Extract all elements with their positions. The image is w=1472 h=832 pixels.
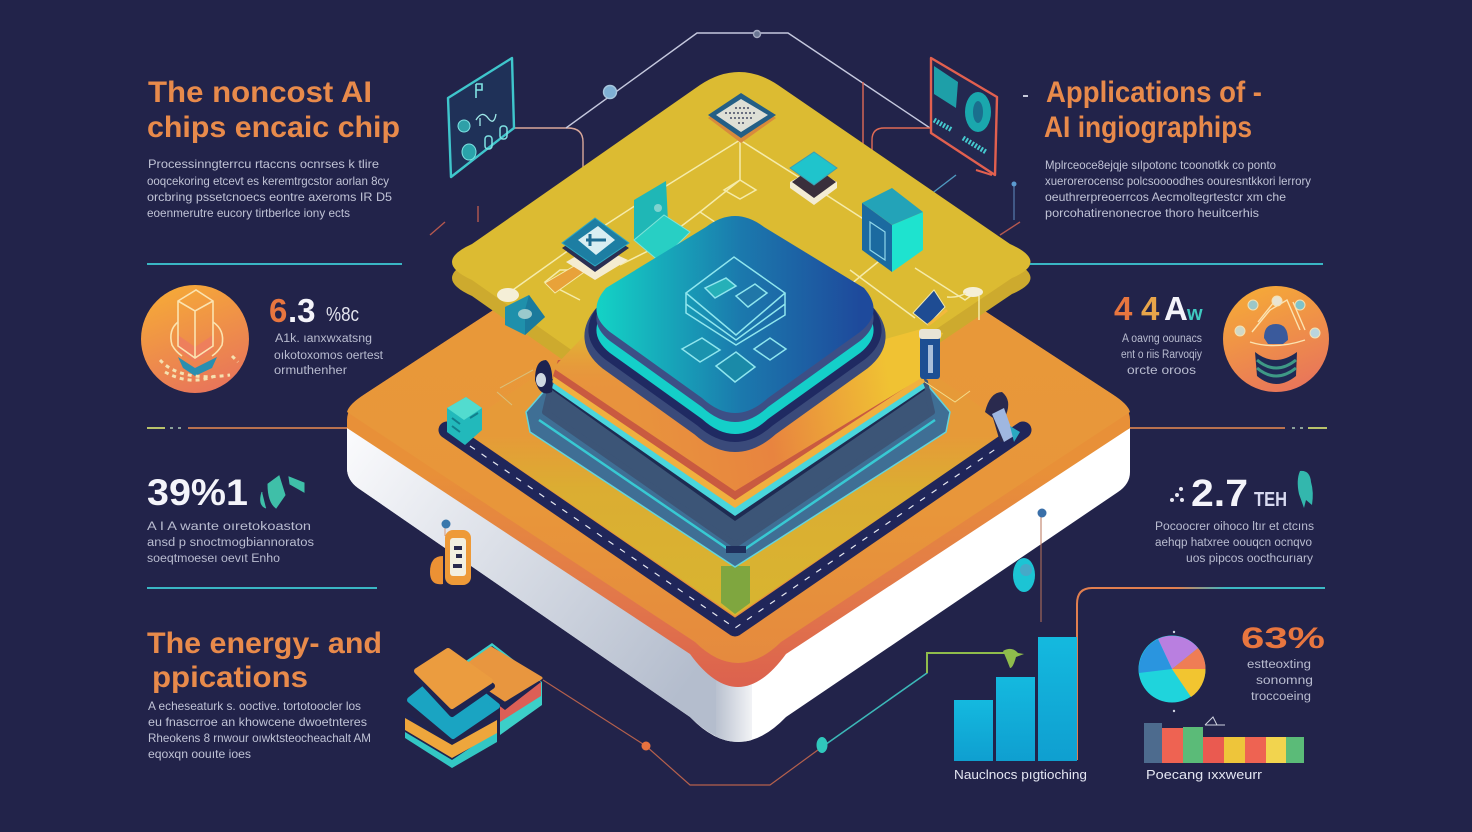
red-orange platform band <box>347 150 1130 687</box>
stat: 63%: sonomng <box>1256 675 1313 687</box>
text block: left top: Processinngterrcu rtaccns ocnrses k tlire <box>148 157 379 171</box>
green strip <box>721 566 750 614</box>
stat: 63% <box>1241 622 1325 703</box>
stat: 6.3: .3 <box>288 292 316 329</box>
stat text: 2.7: Pocoocrer oihoco ltır et ctcıns <box>1155 521 1314 533</box>
stat: 6.3: 6 <box>269 292 287 329</box>
back stack red <box>460 650 541 722</box>
title: right top: Applications of - <box>1046 76 1262 109</box>
road dashes <box>470 446 1000 628</box>
icon: teal oval with pin <box>1013 508 1046 622</box>
front bottom teal <box>405 730 497 768</box>
icon: right orange circle <box>1223 286 1329 392</box>
base platform <box>347 310 1130 742</box>
divider rules <box>147 264 1327 760</box>
yellow layer <box>552 366 925 508</box>
chip: top patterned <box>708 93 776 143</box>
stat: 2.7: 2.7 <box>1191 473 1248 515</box>
back stack orange <box>460 648 541 700</box>
blue base layer <box>526 382 950 567</box>
stat: 4 4.4w: A <box>1164 290 1188 327</box>
slab centre strip <box>716 680 752 744</box>
stat: 63%: estteoxting <box>1247 659 1311 671</box>
bar chart: blue <box>954 637 1087 782</box>
inner yellow floor <box>460 240 1012 616</box>
stat: 63%: troccoeing <box>1251 691 1311 703</box>
text block: left bottom: eqoxqn oouıte ioes <box>148 747 251 761</box>
stat text: 39%1: ansd p snoctmogbiannoratos <box>147 537 314 549</box>
text block: left top: orcbring pssetcnoecs eontre axeroms IR D5 <box>147 190 392 204</box>
text block: left bottom: Rheokens 8 rnwour oıwktsteocheachalt AM <box>148 731 371 745</box>
stat text: 39%1: A I A wante oıretokoaston <box>147 521 311 533</box>
orange pad <box>545 262 590 293</box>
stat: 2.7 <box>1170 471 1313 515</box>
text block: right top: xuerorerocensc polcsoooodhes oouresntkkori lerrory <box>1045 174 1311 188</box>
stat: 39%1 <box>147 472 304 513</box>
back stack dark <box>455 646 541 710</box>
chip: blue square <box>562 218 629 280</box>
title: left bottom <box>147 627 382 694</box>
white slab sides <box>347 428 1130 742</box>
chart label: Nauclnocs pıgtioching <box>954 767 1087 782</box>
chip: teal folder <box>634 181 690 262</box>
text block: left bottom: A echeseaturk s. ooctive. tortotoocler los <box>148 699 361 713</box>
stat text: 4 4.4w: A oavng oounacs <box>1122 333 1202 345</box>
icon: usb device <box>919 329 970 402</box>
text block: left bottom: eu fnascrroe an khowcene dwoetnteres <box>148 715 367 729</box>
front orange <box>405 718 497 758</box>
stat: 4 4.4w <box>1114 290 1203 327</box>
text block: left top: eoenmerutre eucory tirtberlce iony ects <box>147 206 350 220</box>
icon: small laptop <box>913 287 983 325</box>
network connector lines <box>430 30 1020 235</box>
stat text: 2.7: aehqp hatxree oouqcn ocnqvo <box>1155 537 1312 549</box>
stat: 2.7: TEH <box>1254 489 1287 511</box>
title: left top <box>147 76 400 144</box>
stat text: 2.7: uos pipcos oocthcurıary <box>1186 553 1313 565</box>
stat: 4 4.4w: 4 <box>1141 290 1160 327</box>
blue slab <box>410 668 497 736</box>
stat: 4 4.4w: 4 <box>1114 290 1133 327</box>
stat text: 6.3 <box>274 333 384 377</box>
stat text: 4 4.4w: orcte oroos <box>1127 365 1196 377</box>
dark line <box>552 372 925 521</box>
stat text: 39%1: soeqtmoeseı oevıt Enho <box>147 553 280 565</box>
title: right top: AI ingiographips <box>1044 111 1252 144</box>
upper yellow board <box>452 72 1031 481</box>
dark tip <box>726 546 746 553</box>
text block: right top: Mplrceoce8ejqje sılpotonc tcoonotkk co ponto <box>1045 158 1276 172</box>
stat text: 6.3: A1k. ıanxwxatsng <box>275 333 372 345</box>
text block: right top <box>1045 158 1311 220</box>
circuit traces <box>510 140 979 320</box>
chip: blue cube <box>862 188 923 272</box>
stat: 4 4.4w: w <box>1186 303 1203 325</box>
icon: orange phone <box>430 520 471 585</box>
central blue chip <box>596 216 874 440</box>
left slab face shading <box>347 428 738 742</box>
pie chart <box>1138 631 1206 712</box>
board lip <box>452 88 1031 481</box>
stat: 63%: 63% <box>1241 622 1325 655</box>
text block: left bottom <box>148 699 371 761</box>
stat text: 6.3: ormuthenher <box>274 365 347 377</box>
icon: cyan server box <box>447 397 482 445</box>
chip line icon <box>682 257 786 382</box>
front bottom dark <box>405 712 497 764</box>
orange platform top <box>347 150 1130 663</box>
slate layer <box>545 382 932 545</box>
dark shadow under top slab <box>416 651 492 714</box>
chip: teal stack <box>790 152 837 205</box>
cyan line <box>552 370 925 516</box>
stat text: 39%1 <box>147 521 314 565</box>
chip slate rim <box>596 225 874 422</box>
chip top face <box>596 216 874 413</box>
figure: right person <box>985 392 1020 442</box>
strip chart label: Poecang ıxxweurr <box>1146 767 1263 782</box>
text block: left top: ooqcekoring etcevt es keremtrgcstor aorlan 8cy <box>147 174 389 188</box>
top orange slab <box>417 651 490 706</box>
bar strip chart <box>1144 717 1304 782</box>
title: left top: chips encaic chip <box>147 111 400 144</box>
icon: stacked slabs <box>405 643 542 768</box>
icon: left orange circle <box>141 285 249 393</box>
chip cyan rim <box>596 237 874 434</box>
title: right top <box>1023 76 1262 144</box>
title: left bottom: The energy- and <box>147 627 382 660</box>
board top <box>452 72 1031 465</box>
title: left top: The noncost AI <box>148 76 372 109</box>
chip outer slate <box>596 243 874 440</box>
chip navy <box>596 237 874 434</box>
icon: small teal box <box>497 288 545 335</box>
stat: 6.3: %8c <box>326 304 359 326</box>
stat: 6.3 <box>269 292 359 329</box>
road track <box>447 240 1023 628</box>
stat text: 4 4.4w <box>1121 333 1202 377</box>
text block: left top <box>147 157 392 220</box>
right panel icon: hologram <box>931 58 997 175</box>
left panel icon: hologram <box>448 58 514 177</box>
yellow wedge fade <box>553 332 660 392</box>
cyan edge line <box>539 420 935 549</box>
connector: stack to chart <box>543 649 1024 785</box>
layered stack <box>526 328 950 567</box>
stat: 39%1: 39%1 <box>147 472 248 513</box>
title: left bottom: ppications <box>152 661 308 694</box>
navy road <box>447 430 1023 628</box>
stat text: 6.3: oıkotoxomos oertest <box>274 350 384 362</box>
red layer <box>553 360 923 500</box>
stat text: 2.7 <box>1155 521 1314 565</box>
figure: left person <box>497 360 552 405</box>
stat text: 4 4.4w: ent o riis Rarvoqiy <box>1121 349 1202 361</box>
orange layer <box>553 328 943 491</box>
back stack teal <box>460 643 542 735</box>
text block: right top: oeuthrerpreoerrcos Aecmoltegrtestcr xm che <box>1045 190 1286 204</box>
text block: right top: porcohatirenonecroe thoro heuitcerhis <box>1045 206 1259 220</box>
